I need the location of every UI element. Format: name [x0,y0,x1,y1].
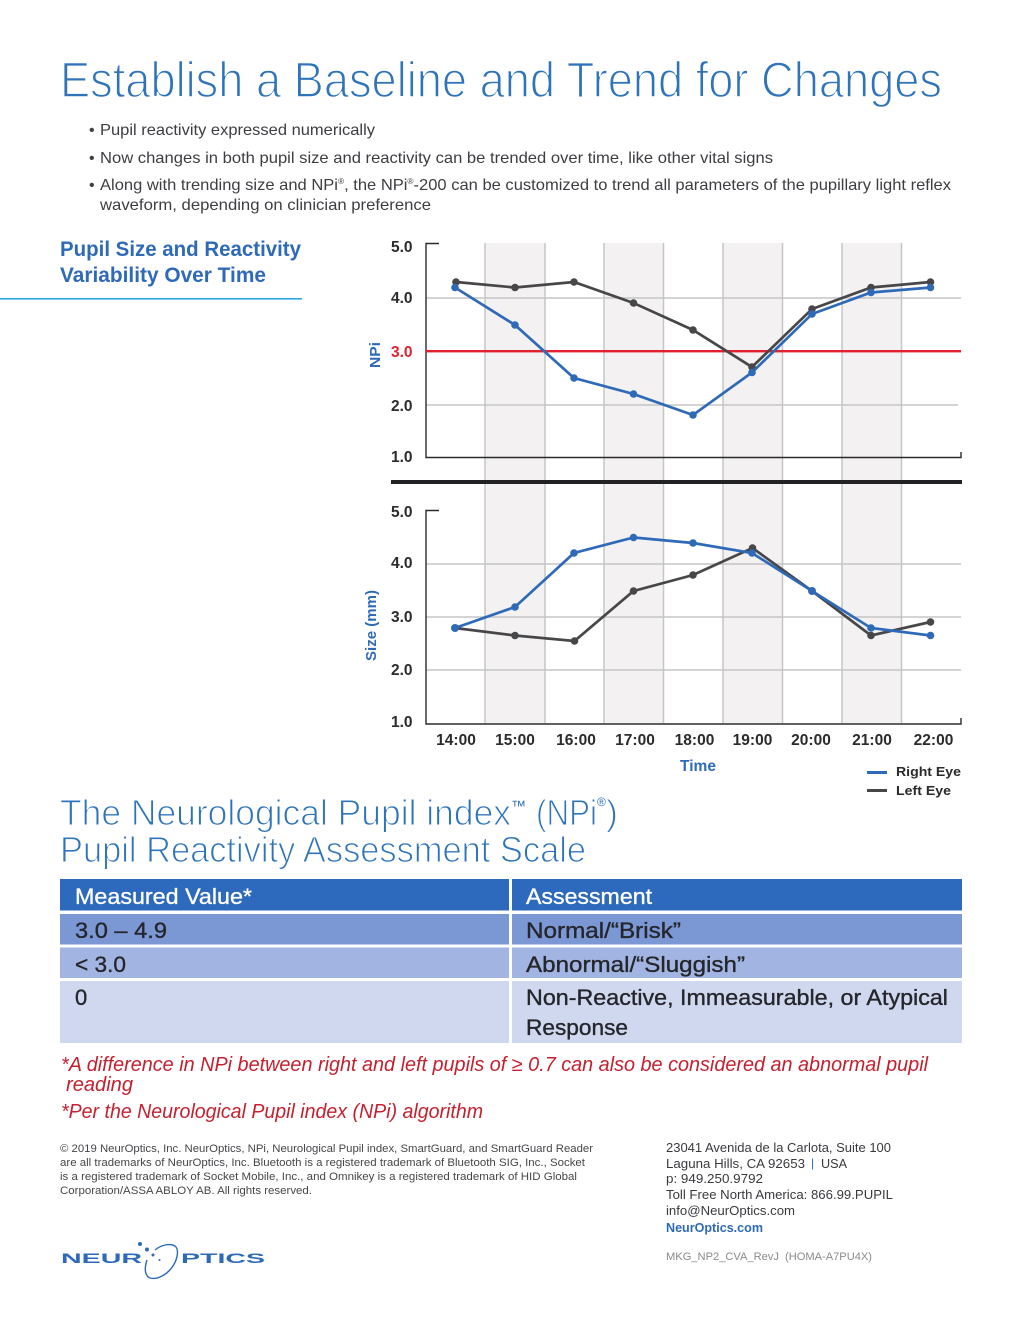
table footnotes: *A difference in NPi between right and left pupils of ≥ 0.7 can also be considered an abnormal pupil [61,1054,929,1076]
logo: NeurOptics: NEUR [61,1250,142,1266]
NPi axis labels [367,239,413,466]
time axis labels [436,732,953,775]
bullet list: • [89,150,95,167]
NPi axis labels: NPi [367,342,384,368]
scale heading: Pupil Reactivity Assessment Scale [60,829,586,870]
time axis labels: 15:00 [495,732,535,749]
time axis labels: 20:00 [791,732,831,749]
row: non-reactive [60,981,962,1043]
time axis labels: Time [680,758,716,775]
row: normal: Normal/“Brisk” [526,918,681,943]
size axis labels: 4.0 [391,555,413,572]
time axis labels: 17:00 [615,732,655,749]
row: abnormal [60,948,962,978]
bullet list: -200 can be customized to trend all parameters of the pupillary light reflex [414,177,951,194]
bullet list [89,122,951,214]
table: reactivity assessment scale [60,879,962,1043]
bullet list: ® [338,177,344,186]
logo: NeurOptics [61,1242,265,1278]
bullet list: • [89,122,95,139]
document code: MKG_NP2_CVA_RevJ [666,1251,779,1263]
row: normal: 3.0 – 4.9 [75,918,167,943]
legend: Right Eye [896,764,961,779]
right eye size line [451,534,934,639]
title: Establish a Baseline and Trend for Changes [60,52,942,108]
contact details: p: 949.250.9792 [666,1171,763,1186]
left eye size line [455,544,934,645]
time axis labels: 18:00 [675,732,714,749]
table header row [60,879,962,910]
size axis labels: 1.0 [391,714,413,731]
chart: pupil size over time [364,504,961,775]
contact details: NeurOptics.com [666,1220,763,1235]
time axis labels: 22:00 [914,732,953,749]
bullet list: , the NPi [344,177,407,194]
row: non-reactive: Non-Reactive, Immeasurable, or Atypical [526,985,948,1010]
copyright notice: are all trademarks of NeurOptics, Inc. Bluetooth is a registered trademark of Bluetooth SIG, Inc., Socket [60,1157,585,1169]
scale heading: The Neurological Pupil index [60,792,511,833]
table footnotes: reading [66,1074,133,1096]
size axis labels [364,504,413,731]
NPi axis labels: 2.0 [391,398,413,415]
NPi axis labels: 1.0 [391,449,413,466]
legend [867,764,961,798]
row: abnormal: < 3.0 [75,952,126,977]
bullet list: • [89,177,95,194]
contact details: info@NeurOptics.com [666,1203,795,1218]
chart heading [0,238,302,300]
table footnotes: *Per the Neurological Pupil index (NPi) algorithm [61,1101,483,1123]
row: abnormal: Abnormal/“Sluggish” [526,952,745,977]
chart heading: Pupil Size and Reactivity [60,238,301,261]
time axis labels: 19:00 [733,732,772,749]
contact details [666,1140,893,1235]
table header row: Assessment [526,884,652,909]
left eye NPi line [452,278,934,371]
NPi axis labels: 4.0 [391,290,413,307]
legend: Left Eye [896,783,951,798]
right eye NPi line [451,284,934,419]
divider between charts [391,480,962,484]
scale heading: ™ [511,798,526,815]
table footnotes [61,1054,929,1123]
copyright notice: Corporation/ASSA ABLOY AB. All rights reserved. [60,1185,312,1197]
document code: (HOMA-A7PU4X) [785,1251,872,1263]
size axis labels: 5.0 [391,504,413,521]
bullet list: Pupil reactivity expressed numerically [100,122,375,139]
time axis labels: 14:00 [436,732,476,749]
bullet list: Along with trending size and NPi [100,177,330,194]
scale heading: ® [597,795,606,809]
size axis labels: Size (mm) [364,590,380,661]
logo: NeurOptics: PTICS [181,1250,265,1266]
chart: NPi over time [367,239,961,466]
contact details: Laguna Hills, CA 92653 [666,1156,805,1171]
bullet list: ® [407,177,414,186]
scale heading: ) [606,792,618,833]
copyright notice: is a registered trademark of Socket Mobile, Inc., and Omnikey is a registered trademark of HID Global [60,1171,577,1183]
copyright notice: © 2019 NeurOptics, Inc. NeurOptics, NPi, Neurological Pupil index, SmartGuard, and SmartGuard Reader [60,1143,593,1155]
bullet list: waveform, depending on clinician preference [99,197,431,214]
size axis labels: 3.0 [391,609,413,626]
contact details: | [811,1156,814,1170]
size axis labels: 2.0 [391,662,413,679]
copyright notice [60,1143,593,1197]
scale heading [60,792,618,870]
row: normal [60,914,962,944]
table header row: Measured Value* [75,884,252,909]
contact details: 23041 Avenida de la Carlota, Suite 100 [666,1140,891,1155]
time axis labels: 21:00 [852,732,892,749]
chart heading: Variability Over Time [60,264,266,287]
bullet list: Now changes in both pupil size and reactivity can be trended over time, like other vital signs [100,150,773,167]
contact details: Toll Free North America: 866.99.PUPIL [666,1187,893,1202]
scale heading: (NPi [536,792,597,833]
document code [666,1251,872,1263]
NPi axis labels: 3.0 [391,344,413,361]
time axis labels: 16:00 [556,732,596,749]
row: non-reactive: Response [526,1015,628,1040]
row: non-reactive: 0 [75,985,87,1010]
chart background bands [485,243,902,723]
NPi axis labels: 5.0 [391,239,413,256]
contact details: USA [821,1156,847,1171]
